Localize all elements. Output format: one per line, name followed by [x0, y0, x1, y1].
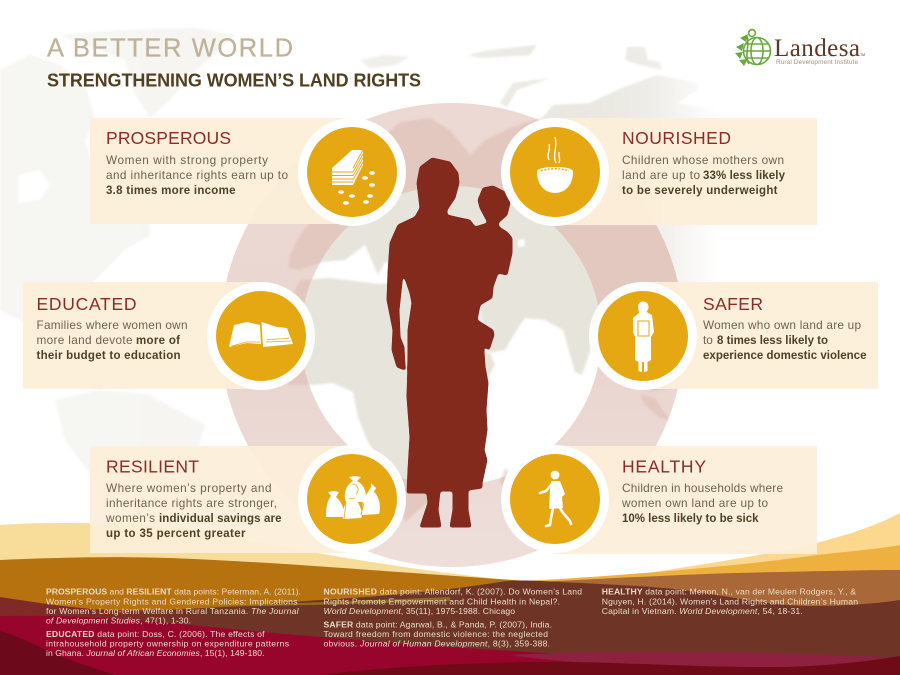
references: column 1: for Women’s Long-term Welfare in Rural Tanzania. The Journal [46, 606, 300, 616]
icon: steaming bowl [501, 118, 609, 226]
text: nourished: to be severely underweight [622, 185, 778, 197]
text: safer [703, 318, 866, 362]
references: column 3: HEALTHY data point: Menon, N., van der Meulen Rodgers, Y., & [602, 586, 856, 596]
text: educated: their budget to education [36, 350, 180, 362]
references: column 3 [602, 586, 858, 616]
subtitle: STRENGTHENING WOMEN’S LAND RIGHTS [47, 70, 421, 90]
text: nourished [622, 153, 786, 197]
central globe map [304, 186, 598, 482]
text: resilient: individual savings are [159, 513, 282, 525]
references: column 1: intrahousehold property ownership on expenditure patterns [46, 638, 289, 648]
references: column 2: NOURISHED data point: Allendorf, K. (2007). Do Women’s Land [324, 586, 582, 596]
heading: safer: SAFER [703, 294, 763, 314]
logo: Landesa [735, 30, 865, 66]
text: educated [36, 318, 188, 362]
logo: Landesa: Landesa [774, 35, 860, 62]
text: resilient: up to 35 percent greater [106, 528, 246, 540]
logo: Landesa: TM [860, 53, 865, 57]
references: column 3: Capital in Vietnam. World Development, 54, 18-31. [602, 606, 803, 616]
text: resilient: inheritance rights are stronger, [106, 496, 277, 510]
logo: Landesa: Rural Development Institute [776, 59, 858, 66]
icon: open book [207, 282, 315, 390]
icon: running child [501, 445, 609, 553]
heading: prosperous: PROSPEROUS [106, 128, 231, 148]
text: educated: more land devote [36, 333, 133, 347]
icon: woman holding document [589, 282, 697, 390]
references: column 1 [46, 586, 301, 658]
central globe ring [226, 103, 678, 567]
text: resilient: women’s [105, 511, 155, 525]
text: healthy: Children in households where [622, 481, 783, 495]
references: column 1: Women’s Property Rights and Gendered Policies: Implications [46, 596, 298, 606]
references: column 2: SAFER data point: Agarwal, B., & Panda, P. (2007), India. [324, 620, 552, 630]
text: prosperous: 3.8 times more income [106, 185, 236, 197]
panel: educated [23, 282, 315, 390]
text: prosperous: Women with strong property [106, 153, 268, 167]
text: healthy: women own land are up to [621, 496, 768, 510]
text: nourished: Children whose mothers own [622, 153, 784, 167]
heading: nourished: NOURISHED [622, 128, 731, 148]
text: nourished: land are up to [622, 168, 700, 182]
world map background [0, 28, 740, 565]
text: educated: more of [136, 335, 180, 347]
text: prosperous [106, 153, 288, 197]
woman and child silhouette [387, 158, 512, 527]
references: column 2: Rights Promote Empowerment and Child Health in Nepal?. [324, 596, 560, 606]
panel: healthy [501, 445, 817, 554]
text: healthy [621, 481, 783, 525]
text: resilient: Where women’s property and [106, 481, 272, 495]
panel: safer [589, 282, 878, 390]
references: column 2: obvious. Journal of Human Development, 8(3), 359-388. [324, 638, 550, 648]
text: nourished: 33% less likely [703, 170, 786, 182]
references: column 1: EDUCATED data point: Doss, C. (2006). The effects of [46, 629, 265, 639]
panel: nourished [501, 118, 817, 226]
heading: healthy: HEALTHY [622, 456, 706, 476]
references: column 2: World Development, 35(11), 1975-1988. Chicago [324, 606, 515, 616]
title: A BETTER WORLD [47, 34, 293, 62]
text: safer: 8 times less likely to [717, 335, 828, 347]
references: column 1: of Development Studies, 47(1), 1-30. [46, 616, 191, 626]
icon: money stack and coins [298, 118, 406, 226]
text: prosperous: and inheritance rights earn up to [106, 168, 288, 182]
text: resilient [105, 481, 282, 540]
text: safer: experience domestic violence [703, 350, 866, 362]
references: column 3: Nguyen, H. (2014). Women’s Land Rights and Children’s Human [602, 596, 858, 606]
panel: resilient [90, 445, 406, 553]
references: column 1: in Ghana. Journal of African Economies, 15(1), 149-180. [46, 648, 264, 658]
references: column 2: Toward freedom from domestic violence: the neglected [324, 629, 548, 639]
heading: educated: EDUCATED [36, 294, 136, 314]
heading: resilient: RESILIENT [106, 456, 199, 476]
text: safer: Women who own land are up [703, 318, 861, 332]
icon: sacks of money [298, 445, 406, 553]
panel: prosperous [90, 118, 406, 226]
text: healthy: 10% less likely to be sick [622, 513, 759, 525]
references: column 1: PROSPEROUS and RESILIENT data points: Peterman, A. (2011). [46, 586, 301, 596]
references: column 2 [324, 586, 582, 648]
bottom wave band [0, 513, 900, 675]
text: safer: to [703, 333, 713, 347]
text: educated: Families where women own [36, 318, 188, 332]
